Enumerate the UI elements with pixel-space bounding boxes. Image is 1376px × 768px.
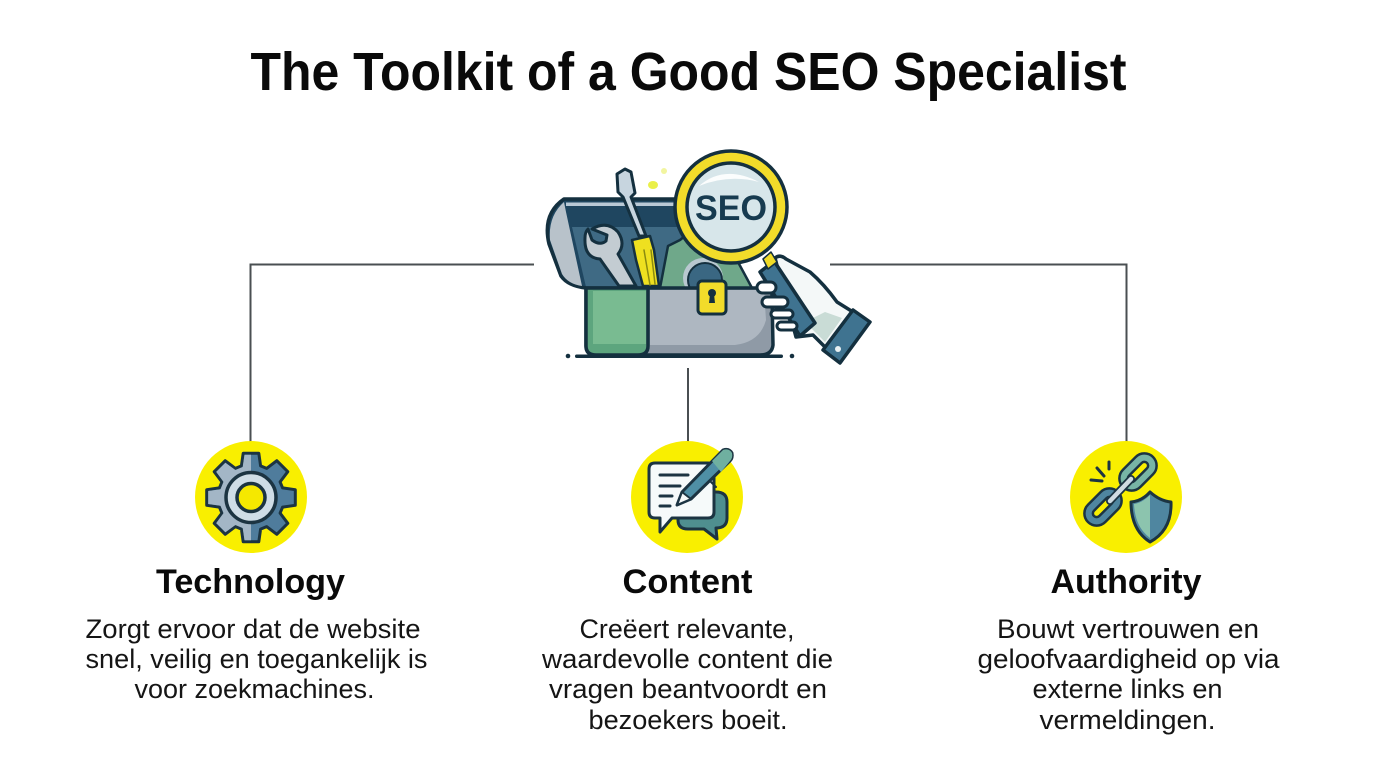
toolbox lid: [547, 199, 690, 288]
connector: toolbox to authority: [830, 264, 1126, 442]
description: content: vragen beantvoordt en: [549, 674, 827, 704]
hand fingers and cuff: [757, 282, 870, 363]
icon: SEO toolbox illustration: [547, 151, 870, 363]
title: The Toolkit of a Good SEO Specialist: [250, 42, 1127, 102]
description: technology: snel, veilig en toegankelijk is: [86, 644, 428, 674]
description: content: Creëert relevante,: [580, 614, 794, 644]
ground line: [566, 354, 794, 358]
heading: authority: Authority: [1050, 563, 1202, 601]
connector: toolbox to content: [687, 368, 689, 442]
description: authority: externe links en: [1032, 674, 1222, 704]
description: content: bezoekers boeit.: [588, 705, 788, 735]
icon: chain link and shield: [1070, 441, 1182, 553]
hand palm: [775, 256, 853, 348]
gear inside toolbox: [660, 232, 752, 288]
description: technology: voor zoekmachines.: [134, 674, 374, 704]
toolbox body: [586, 288, 773, 355]
icon: gear: [195, 441, 307, 553]
panel: technology: [86, 441, 428, 704]
icon: document and pen: [631, 441, 743, 553]
padlock: [698, 281, 726, 314]
wrench: [585, 225, 636, 286]
description: content: waardevolle content die: [541, 644, 833, 674]
description: technology: [86, 614, 428, 704]
screwdriver: [617, 169, 659, 286]
heading: technology: Technology: [156, 563, 345, 601]
magnifying glass lens: SEO: [695, 189, 767, 228]
description: content: [541, 614, 833, 735]
panel: authority: [978, 441, 1281, 735]
connector: toolbox to technology: [250, 264, 534, 442]
sparkles: [648, 181, 658, 189]
description: authority: geloofvaardigheid op via: [978, 644, 1281, 674]
heading: content: Content: [622, 563, 752, 601]
description: authority: [978, 614, 1281, 735]
panel: content: [541, 441, 833, 735]
magnifier handle: [760, 261, 815, 336]
description: authority: vermeldingen.: [1040, 705, 1216, 735]
magnifying glass lens: [675, 151, 787, 263]
description: authority: Bouwt vertrouwen en: [997, 614, 1259, 644]
description: technology: Zorgt ervoor dat de website: [86, 614, 420, 644]
